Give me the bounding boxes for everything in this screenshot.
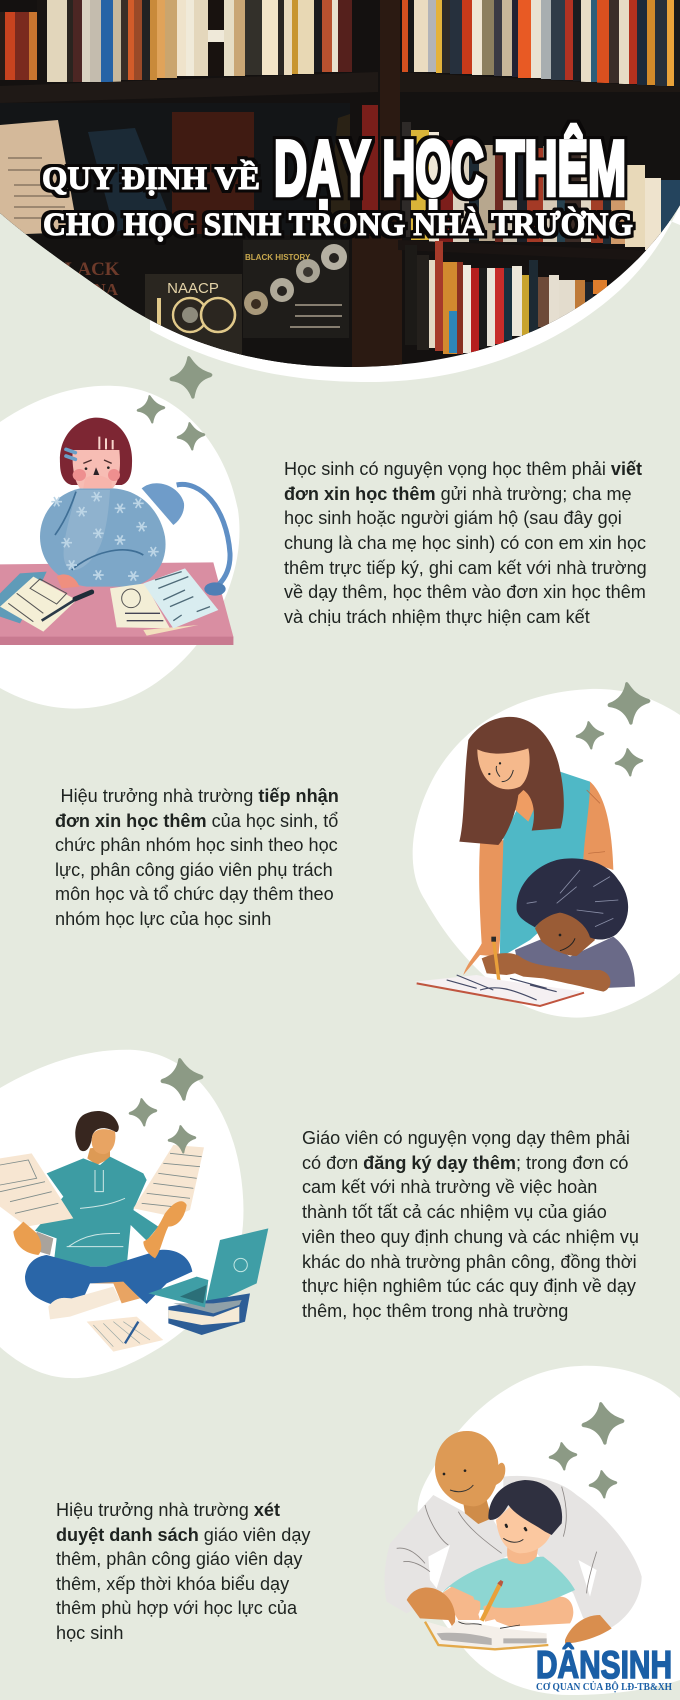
sparkles 2 [574,680,653,778]
panel 4: father and son [384,1366,680,1695]
text block 2: Hiệu trưởng nhà trường tiếp nhận [60,786,339,806]
text block 3: khác do nhà trường phân công, đồng thời [302,1252,637,1272]
text block 4: Hiệu trưởng nhà trường xét [56,1500,280,1520]
teacher hair [459,717,564,845]
title line 3: CHO HỌC SINH TRONG NHÀ TRƯỜNG: CHO HỌC SINH TRONG NHÀ TRƯỜNG [43,205,633,243]
title line 1: QUY ĐỊNH VỀ: QUY ĐỊNH VỀ [42,158,260,197]
text block 2: nhóm học lực của học sinh [55,909,271,929]
text block 4: thêm, xếp thời khóa biểu dạy [56,1574,290,1594]
sparkles 3 [127,1056,206,1128]
text block 4: thêm phù hợp với học lực của [56,1598,298,1618]
text block 1: học sinh hoặc người giám hộ (sau đây gọi [284,508,622,528]
sparkles 4 [547,1400,627,1500]
shelf boards and post [0,72,378,103]
text block 1: thêm trực tiếp ký, ghi cam kết với nhà trường [284,558,647,578]
board under second row right [398,240,646,260]
text block 3: thành tốt tất cả các nhiệm vụ của giáo [302,1202,607,1222]
top shelf books right [402,0,680,87]
text block 3: thêm, học thêm trong nhà trường [302,1301,568,1321]
child hair [517,858,628,940]
text block 3: Giáo viên có nguyện vọng dạy thêm phải [302,1128,630,1148]
header photo: bookshelf [0,0,680,370]
white arc under header [150,200,680,382]
panel 3: teacher with laptop [0,1050,268,1378]
text block 3: viên theo quy định chung và các nhiệm vụ [302,1227,639,1247]
text block 1: chung là cha mẹ học sinh) có con em xin học [284,533,646,553]
text block 3: cam kết với nhà trường về việc hoàn [302,1177,597,1197]
man hair [75,1111,119,1151]
third row books left: BLACK [52,259,120,280]
text block 4: học sinh [56,1623,123,1643]
text block 2: đơn xin học thêm của học sinh, tổ [55,811,338,831]
white blob 2 [413,689,680,1018]
text block 3: có đơn đăng ký dạy thêm; trong đơn có [302,1153,628,1173]
text block 2: chức phân nhóm học sinh theo học [55,835,338,855]
third row books right [405,241,607,354]
white blob 3 [0,1050,243,1378]
text block 1: Học sinh có nguyện vọng học thêm phải viết [284,459,642,479]
text block 1: đơn xin học thêm gửi nhà trường; cha mẹ [284,484,632,504]
sparkle 3 front [166,1124,198,1155]
title [42,124,633,243]
father head [435,1431,505,1506]
text block 2: lực, phân công giáo viên phụ trách [55,860,333,880]
top shelf books left [0,0,352,82]
illustration: man reading papers [0,1111,268,1352]
header photo: bookshelf: NAACP [167,280,219,297]
header photo: bookshelf: BLACK HISTORY [245,253,311,262]
text block 1: và chịu trách nhiệm thực hiện cam kết [284,607,590,627]
illustration: teacher helping child [415,717,635,1006]
illustration: girl at desk with lamp [0,418,233,645]
second row books left [0,120,78,235]
panel 1: student writing [0,354,240,709]
text block 1: về dạy thêm, học thêm vào đơn xin học thêm [284,582,646,602]
poster details [244,291,268,315]
sparkles 1 [135,354,215,452]
text block 4: thêm, phân công giáo viên dạy [56,1549,303,1569]
text block 3: thực hiện nghiêm túc các quy định về dạy [302,1276,637,1296]
white blob 4 [416,1366,680,1695]
second row books right [402,122,680,250]
illustration: father helping son [384,1431,642,1649]
panel 2: teacher and child [413,680,680,1018]
text block 2: môn học và tổ chức dạy thêm theo [55,884,334,904]
white blob 1 [0,386,240,709]
text block 4: duyệt danh sách giáo viên dạy [56,1525,310,1545]
header photo: bookshelf: RICANA [50,280,119,299]
